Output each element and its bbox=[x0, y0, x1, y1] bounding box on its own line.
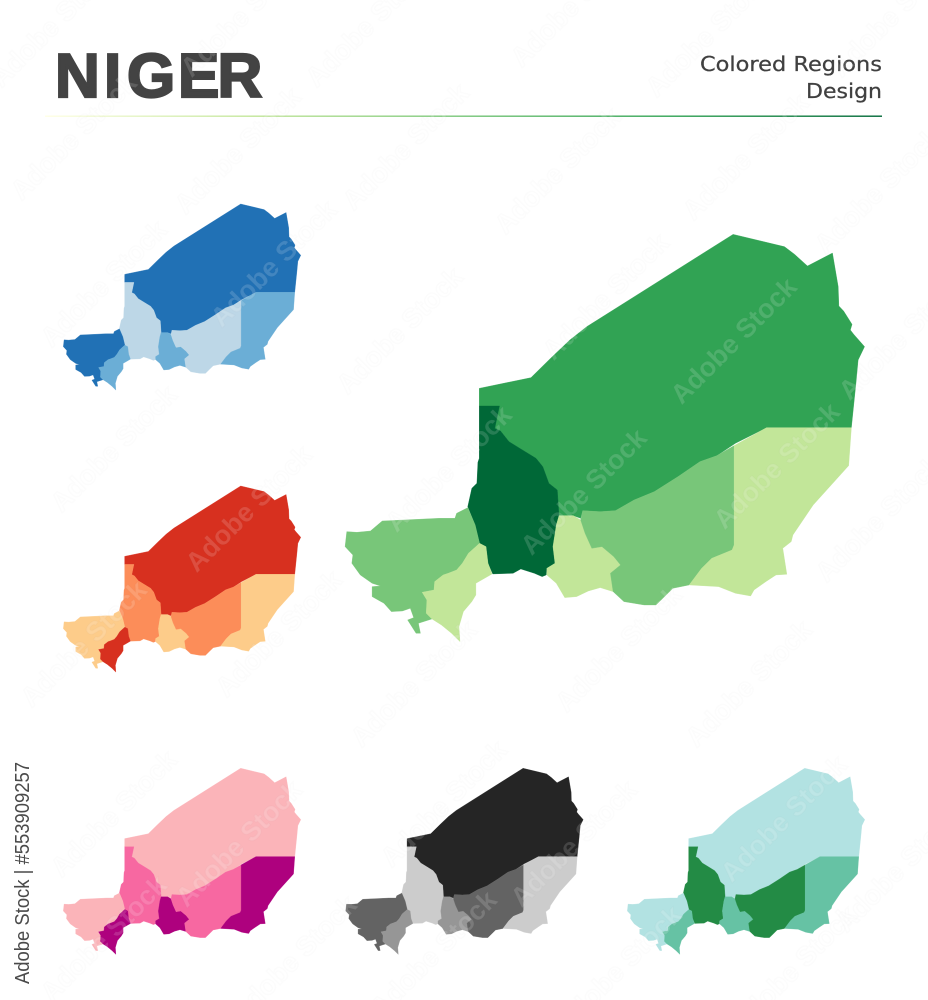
map: grayscale Niger bbox=[346, 768, 583, 954]
watermark pattern: Adobe Stock bbox=[715, 749, 853, 888]
watermark pattern: Adobe Stock bbox=[677, 87, 815, 226]
watermark pattern: Adobe Stock bbox=[550, 579, 688, 718]
region: south-central, pale green bbox=[547, 516, 621, 598]
subtitle: Design bbox=[806, 79, 882, 103]
watermark pattern: Adobe Stock bbox=[169, 81, 307, 220]
subtitle: Colored Regions bbox=[700, 52, 882, 76]
watermark pattern: Adobe Stock bbox=[45, 744, 183, 883]
map: pink Niger bbox=[63, 768, 301, 954]
watermark pattern: Adobe Stock bbox=[375, 734, 513, 873]
watermark pattern: Adobe Stock bbox=[489, 101, 627, 240]
watermark pattern: Adobe Stock bbox=[15, 574, 153, 713]
watermark pattern: Adobe Stock bbox=[331, 261, 469, 400]
watermark pattern: Adobe Stock bbox=[170, 774, 308, 913]
watermark pattern: Adobe Stock bbox=[5, 67, 143, 206]
watermark pattern: Adobe Stock bbox=[345, 614, 483, 753]
watermark pattern: Adobe Stock bbox=[515, 422, 653, 561]
map: teal Niger bbox=[627, 768, 865, 954]
region: east, pale green bbox=[689, 428, 851, 596]
map: red-orange Niger bbox=[63, 486, 301, 672]
watermark pattern: Adobe Stock bbox=[680, 614, 818, 753]
region: central-south, light green bbox=[581, 446, 734, 605]
watermark pattern: Adobe Stock bbox=[45, 379, 183, 518]
header bbox=[45, 42, 882, 117]
watermark pattern: Adobe Stock bbox=[210, 564, 348, 703]
watermark pattern: Adobe Stock bbox=[665, 271, 803, 410]
watermark pattern: Adobe Stock bbox=[537, 227, 675, 366]
watermark pattern: Adobe Stock bbox=[35, 214, 173, 353]
watermark pattern: Adobe Stock bbox=[708, 396, 846, 535]
watermark pattern: Adobe Stock bbox=[337, 77, 475, 216]
stock id vertical text: Adobe Stock | #553909257 bbox=[12, 762, 34, 984]
region: west-central, dark green bbox=[468, 406, 559, 577]
watermark pattern: Adobe Stock bbox=[205, 194, 343, 333]
region: west, light green bbox=[345, 508, 480, 633]
map: large green Niger bbox=[345, 234, 865, 642]
watermark pattern: Adobe Stock bbox=[505, 774, 643, 913]
header rule bbox=[45, 116, 882, 117]
watermark pattern: Adobe Stock bbox=[380, 399, 518, 538]
title: NIGER bbox=[55, 42, 262, 111]
region: north, mid green bbox=[479, 234, 865, 518]
subtitle bbox=[700, 52, 882, 103]
watermark pattern: Adobe Stock bbox=[180, 439, 318, 578]
region: southwest, pale green bbox=[422, 543, 492, 642]
map: blue Niger bbox=[63, 204, 301, 390]
